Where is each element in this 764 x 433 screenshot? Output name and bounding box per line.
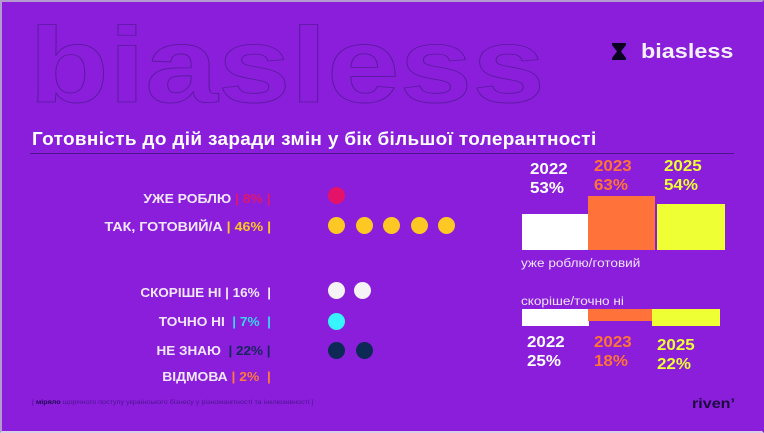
chart label: уже роблю/готовий <box>521 258 640 270</box>
dots: уже роблю <box>328 187 345 204</box>
2025 value: 54% <box>664 177 698 194</box>
dots: скоріше ні <box>328 282 371 299</box>
footnote: [ міряло щорічного поступу українського бізнесу у різноманітності та інклюзивності ] <box>32 399 314 406</box>
bar 2022 <box>522 214 589 250</box>
riven logo: riven’ <box>692 395 735 411</box>
row: відмова: ВІДМОВА | 2% | <box>162 370 271 384</box>
chart label: скоріше/точно ні <box>521 296 624 308</box>
bar 2023 <box>588 309 652 321</box>
2022 value <box>530 161 568 197</box>
dots: не знаю <box>328 342 373 359</box>
2023 value <box>594 334 632 370</box>
2022 value: 2022 <box>527 334 565 351</box>
bar 2023 <box>588 196 655 250</box>
bar 2022 <box>522 309 589 326</box>
icon: hourglass <box>612 43 626 60</box>
2025 value <box>657 337 695 373</box>
bar 2025 <box>657 204 725 250</box>
dots: так, готовий <box>328 217 455 234</box>
2023 value: 2023 <box>594 334 632 351</box>
row: уже роблю: УЖЕ РОБЛЮ | 8% | <box>144 192 271 206</box>
2022 value: 2022 <box>530 161 568 178</box>
2025 value <box>664 158 702 194</box>
2022 value <box>527 334 565 370</box>
row: точно ні: ТОЧНО НІ | 7% | <box>159 315 271 329</box>
bar 2025 <box>652 309 720 326</box>
title: Готовність до дій заради змін у бік більшої толерантності <box>32 129 597 149</box>
bar chart: скоріше/точно ні <box>521 296 720 373</box>
row: так, готовий: ТАК, ГОТОВИЙ/А | 46% | <box>104 220 271 234</box>
row: скоріше ні: СКОРІШЕ НІ | 16% | <box>140 286 271 300</box>
logo: biasless <box>612 41 733 63</box>
2022 value: 25% <box>527 353 561 370</box>
dot: точно ні <box>328 313 345 330</box>
title rule <box>30 153 734 154</box>
2025 value: 2025 <box>657 337 695 354</box>
watermark wordmark: biasless <box>29 5 545 125</box>
2025 value: 2025 <box>664 158 702 175</box>
2023 value: 2023 <box>594 158 632 175</box>
logo wordmark: biasless <box>641 41 733 63</box>
2022 value: 53% <box>530 180 564 197</box>
bar chart: уже роблю/готовий <box>521 158 725 270</box>
2023 value <box>594 158 632 194</box>
2023 value: 18% <box>594 353 628 370</box>
2023 value: 63% <box>594 177 628 194</box>
2025 value: 22% <box>657 356 691 373</box>
row: не знаю: НЕ ЗНАЮ | 22% | <box>157 344 271 358</box>
